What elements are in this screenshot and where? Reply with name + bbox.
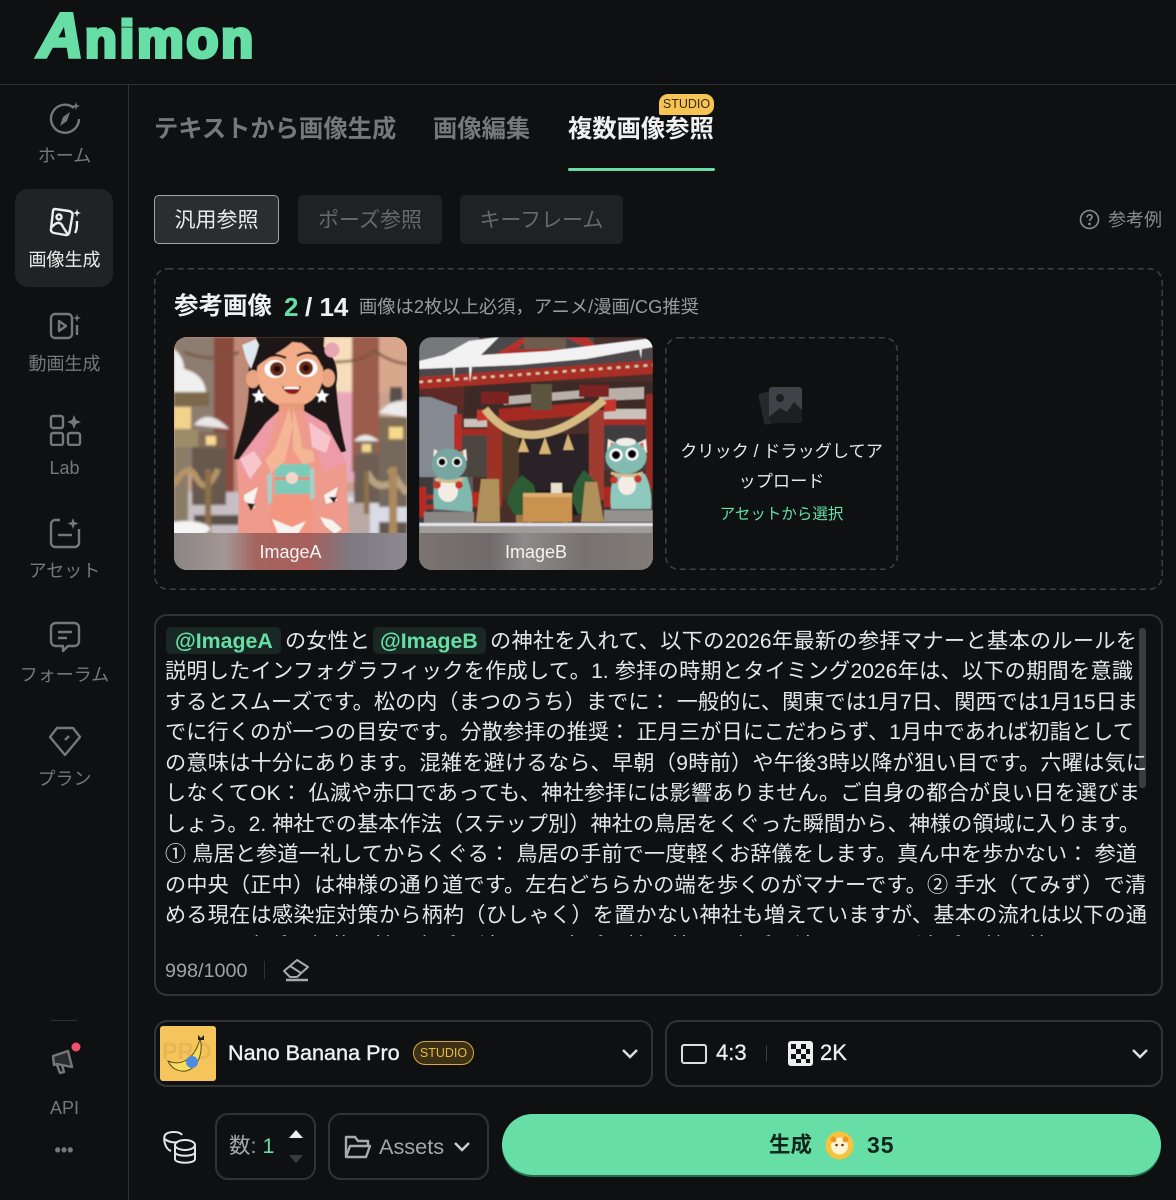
image A label: ImageA — [259, 542, 322, 562]
line 8: ① 鳥居と参道一礼してからくぐる： 鳥居の手前で一度軽くお辞儀をします。真ん中を歩かない： 参道 — [165, 843, 1137, 866]
ratio selector — [665, 1020, 1163, 1087]
line 3: するとスムーズです。松の内（まつのうち）までに： 一般的に、関東では1月7日、関西では1月15日ま — [165, 691, 1138, 714]
mention chip A — [166, 627, 281, 654]
sidebar: forum: フォーラム — [20, 665, 109, 685]
panel: reference images — [154, 268, 1163, 590]
stepper down — [289, 1155, 303, 1163]
sidebar: lab: Lab — [49, 458, 80, 478]
studio tag — [413, 1041, 474, 1065]
line 1 continued b: の神社を入れて、以下の2026年最新の参拝マナーと基本のルールを — [490, 630, 1137, 653]
icon: folder — [344, 1136, 372, 1158]
sidebar: lab — [49, 414, 82, 478]
studio badge — [659, 94, 714, 115]
generate button — [502, 1114, 1161, 1175]
reference examples link: 参考例 — [1108, 210, 1162, 230]
sidebar: API: API — [50, 1098, 79, 1118]
model thumbnail: PRO — [162, 1038, 212, 1064]
character count: 998/1000 — [165, 960, 248, 982]
sidebar: image generation — [28, 208, 100, 270]
sidebar: more dots: ••• — [55, 1140, 73, 1160]
upload instruction: クリック / ドラッグしてア — [680, 441, 883, 461]
logo: Animon: nimon — [85, 11, 256, 69]
assets selector — [328, 1113, 489, 1180]
sub tab: general — [154, 195, 279, 244]
sidebar: plan: プラン — [38, 769, 92, 789]
prompt text — [165, 627, 1155, 936]
line 1 continued a: の女性と — [285, 630, 370, 653]
scrollbar — [1139, 628, 1146, 788]
mention B text: @ImageB — [380, 629, 478, 653]
ratio separator — [766, 1045, 767, 1062]
heading: reference images: / 14 — [305, 292, 348, 322]
mention chip B — [373, 627, 486, 654]
sidebar: forum — [20, 622, 109, 685]
sub tab: general: 汎用参照 — [174, 209, 258, 232]
ratio value: 4:3 — [716, 1040, 747, 1065]
image B label — [419, 533, 653, 570]
sidebar divider short — [51, 1020, 77, 1021]
image A label — [174, 533, 407, 570]
tab: text to image: テキストから画像生成 — [154, 116, 396, 143]
assets label: Assets — [379, 1134, 444, 1159]
sub tab: pose: ポーズ参照 — [318, 209, 422, 232]
prompt panel — [154, 614, 1163, 996]
resolution value: 2K — [820, 1040, 847, 1065]
upload dropzone — [665, 337, 898, 570]
line 10: める現在は感染症対策から柄杓（ひしゃく）を置かない神社も増えていますが、基本の流れは以下の通 — [165, 904, 1147, 927]
tab: image edit: 画像編集 — [433, 116, 530, 143]
sub tab: keyframe: キーフレーム — [479, 209, 604, 232]
icon: resolution — [788, 1041, 813, 1066]
reference examples link — [1080, 210, 1162, 230]
line 9: の中央（正中）は神様の通り道です。左右どちらかの端を歩くのがマナーです。② 手水（てみず）で清 — [165, 874, 1146, 897]
sidebar: assets — [29, 518, 100, 581]
sidebar: home: ホーム — [38, 146, 91, 166]
count separator — [264, 961, 265, 979]
sidebar: home — [38, 102, 91, 166]
sidebar divider — [128, 85, 129, 1200]
stepper up — [289, 1130, 303, 1138]
tab: multi-image reference active: 複数画像参照 — [568, 116, 714, 143]
sidebar: image generation active — [15, 189, 113, 287]
line 7: しょう。2. 神社での基本作法（ステップ別）神社の鳥居をくぐった瞬間から、神様の領域に入ります。 — [165, 813, 1140, 836]
heading: reference images: 2 — [284, 292, 298, 322]
count selector — [215, 1113, 316, 1180]
chevron assets — [454, 1142, 470, 1152]
sidebar: assets: アセット — [29, 561, 100, 581]
header divider — [0, 84, 1176, 85]
icon: ratio — [681, 1044, 707, 1064]
line 6: しなくてOK： 仏滅や赤口であっても、神社参拝には影響ありません。ご自身の都合が良い日を選びま — [165, 782, 1140, 805]
image A: girl in kimono — [174, 337, 407, 570]
model name: Nano Banana Pro — [228, 1040, 400, 1065]
link: select from assets: アセットから選択 — [720, 506, 843, 523]
line 1: @ImageA — [175, 629, 273, 653]
credit cost: 35 — [867, 1132, 895, 1158]
sub tab: keyframe — [460, 195, 623, 244]
upload instruction: ップロード — [739, 471, 824, 491]
sidebar: video generation: 動画生成 — [28, 354, 100, 374]
studio badge: STUDIO — [663, 97, 710, 111]
dropzone border — [665, 337, 898, 570]
logo: Animon: A — [36, 1, 84, 70]
model thumbnail — [160, 1026, 216, 1081]
icon: eraser — [283, 959, 309, 982]
icon: coin — [826, 1132, 854, 1160]
sidebar: API — [50, 1042, 80, 1118]
chevron model — [622, 1049, 638, 1059]
sidebar: plan — [38, 726, 92, 789]
sidebar: video generation — [28, 312, 100, 374]
generate label: 生成 — [769, 1133, 812, 1157]
line 2: 説明したインフォグラフィックを作成して。1. 参拝の時期とタイミング2026年は、以下の期間を意識 — [165, 660, 1133, 683]
heading: reference images: 参考画像 — [174, 293, 272, 320]
count label: 数: 1 — [229, 1134, 274, 1158]
studio tag: STUDIO — [420, 1046, 467, 1060]
tab underline — [568, 168, 715, 171]
heading: reference images — [174, 292, 348, 322]
line 5: の意味は十分にあります。混雑を避けるなら、早朝（9時前）や午後3時以降が狙い目です。六曜は気に — [165, 752, 1147, 775]
upload instruction — [680, 441, 883, 491]
logo: Animon — [34, 1, 256, 70]
note: image requirement: 画像は2枚以上必須，アニメ/漫画/CG推奨 — [359, 296, 699, 317]
icon: upload photos — [758, 387, 802, 424]
chevron ratio — [1132, 1049, 1148, 1059]
line 4: でに行くのが一つの目安です。分散参拝の推奨： 正月三が日にこだわらず、1月中であれば初詣として — [165, 721, 1134, 744]
image B label: ImageB — [505, 542, 567, 562]
sidebar: image generation: 画像生成 — [28, 250, 100, 270]
icon: database — [163, 1131, 196, 1164]
model selector — [154, 1020, 653, 1087]
image B: shrine — [419, 337, 653, 570]
sub tab: pose — [298, 195, 442, 244]
